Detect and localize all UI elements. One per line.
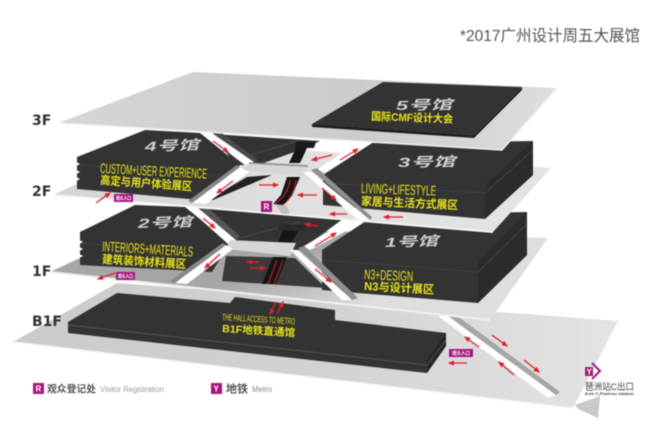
hall 3 label: LIVING+LIFESTYLE xyxy=(361,180,436,199)
legend: visitor registration: 观众登记处 xyxy=(47,382,96,396)
hall 1 label: N3+DESIGN xyxy=(364,266,414,284)
1F entrance arrow and tag xyxy=(98,272,135,280)
entrance tag xyxy=(449,349,473,357)
stair: central escalator xyxy=(273,141,316,214)
exhibition hall: hall 2 xyxy=(80,205,230,272)
floor slab: 3F xyxy=(58,72,557,150)
metro exit label: Exit C,Pazhou station xyxy=(585,391,635,396)
exhibition hall: hall 4 xyxy=(77,130,240,200)
exhibition hall: B1F metro hall xyxy=(68,293,446,373)
legend: visitor registration: Visitor Registration xyxy=(100,385,164,394)
entrance tag: 观众入口 xyxy=(452,350,470,357)
hall 2 name: 2号馆 xyxy=(136,214,195,231)
hall 5 label: 国际CMF设计大会 xyxy=(371,109,453,126)
legend: metro xyxy=(211,382,273,396)
hall label xyxy=(222,312,295,339)
hall 5 name: 5号馆 xyxy=(396,97,455,113)
title: *2017广州设计周五大展馆 xyxy=(460,27,640,45)
upper escalator group 2F to 3F xyxy=(188,133,403,220)
registration marker on 2F: R xyxy=(264,202,270,212)
floor slab: 2F xyxy=(53,150,551,232)
hall 4 label xyxy=(100,160,208,193)
exhibition hall: hall 1 xyxy=(322,212,527,303)
hall 1 label: N3与设计展区 xyxy=(364,279,435,297)
exhibition hall: hall 3 xyxy=(323,141,533,219)
metro exit label: Y xyxy=(586,368,592,376)
floor label: 1F: 1F xyxy=(32,264,51,280)
1F entrance arrow and tag: 观众入口 xyxy=(118,273,133,280)
hall 2 label xyxy=(102,238,194,271)
legend: metro: Metro xyxy=(252,385,273,394)
2F entrance arrow and tag: 观众入口 xyxy=(116,195,131,202)
hall 4 label: 高定与用户体验展区 xyxy=(100,173,193,193)
hall 4 label: CUSTOM+USER EXPERIENCE xyxy=(100,160,208,182)
floor label: 3F: 3F xyxy=(32,113,51,129)
hall label: THE HALL ACCESS TO METRO xyxy=(222,312,295,326)
metro exit label xyxy=(585,363,635,396)
floor slab: B1F xyxy=(13,283,635,418)
legend: metro: 地铁 xyxy=(226,382,248,396)
hall 2 label: INTERIORS+MATERIALS xyxy=(102,238,194,260)
hall 1 label xyxy=(364,266,435,297)
registration marker on 2F xyxy=(261,201,272,212)
legend: visitor registration: R xyxy=(36,384,42,394)
hall 4 name: 4号馆 xyxy=(143,137,202,154)
floor label: B1F: B1F xyxy=(32,314,62,330)
hall 1 name: 1号馆 xyxy=(385,233,441,250)
stair: central escalator xyxy=(262,224,306,284)
hall label: B1F地铁直通馆 xyxy=(222,322,295,339)
hall 2 label: 建筑装饰材料展区 xyxy=(102,252,187,271)
2F entrance arrow and tag xyxy=(96,193,133,203)
floor slab: 1F xyxy=(50,230,548,320)
legend: visitor registration xyxy=(33,382,164,396)
hall 3 label xyxy=(361,180,459,212)
hall 3 label: 家居与生活方式展区 xyxy=(361,194,459,212)
hall 3 name: 3号馆 xyxy=(398,154,458,170)
escalator: B1F to 1F exit xyxy=(438,316,560,398)
lower escalator group 1F to 2F xyxy=(170,206,358,314)
metro exit label: 琶洲站C出口 xyxy=(585,381,634,393)
floor label: 2F: 2F xyxy=(32,184,51,200)
exhibition hall: hall 5 xyxy=(312,82,522,138)
legend: metro: Y xyxy=(214,384,220,394)
